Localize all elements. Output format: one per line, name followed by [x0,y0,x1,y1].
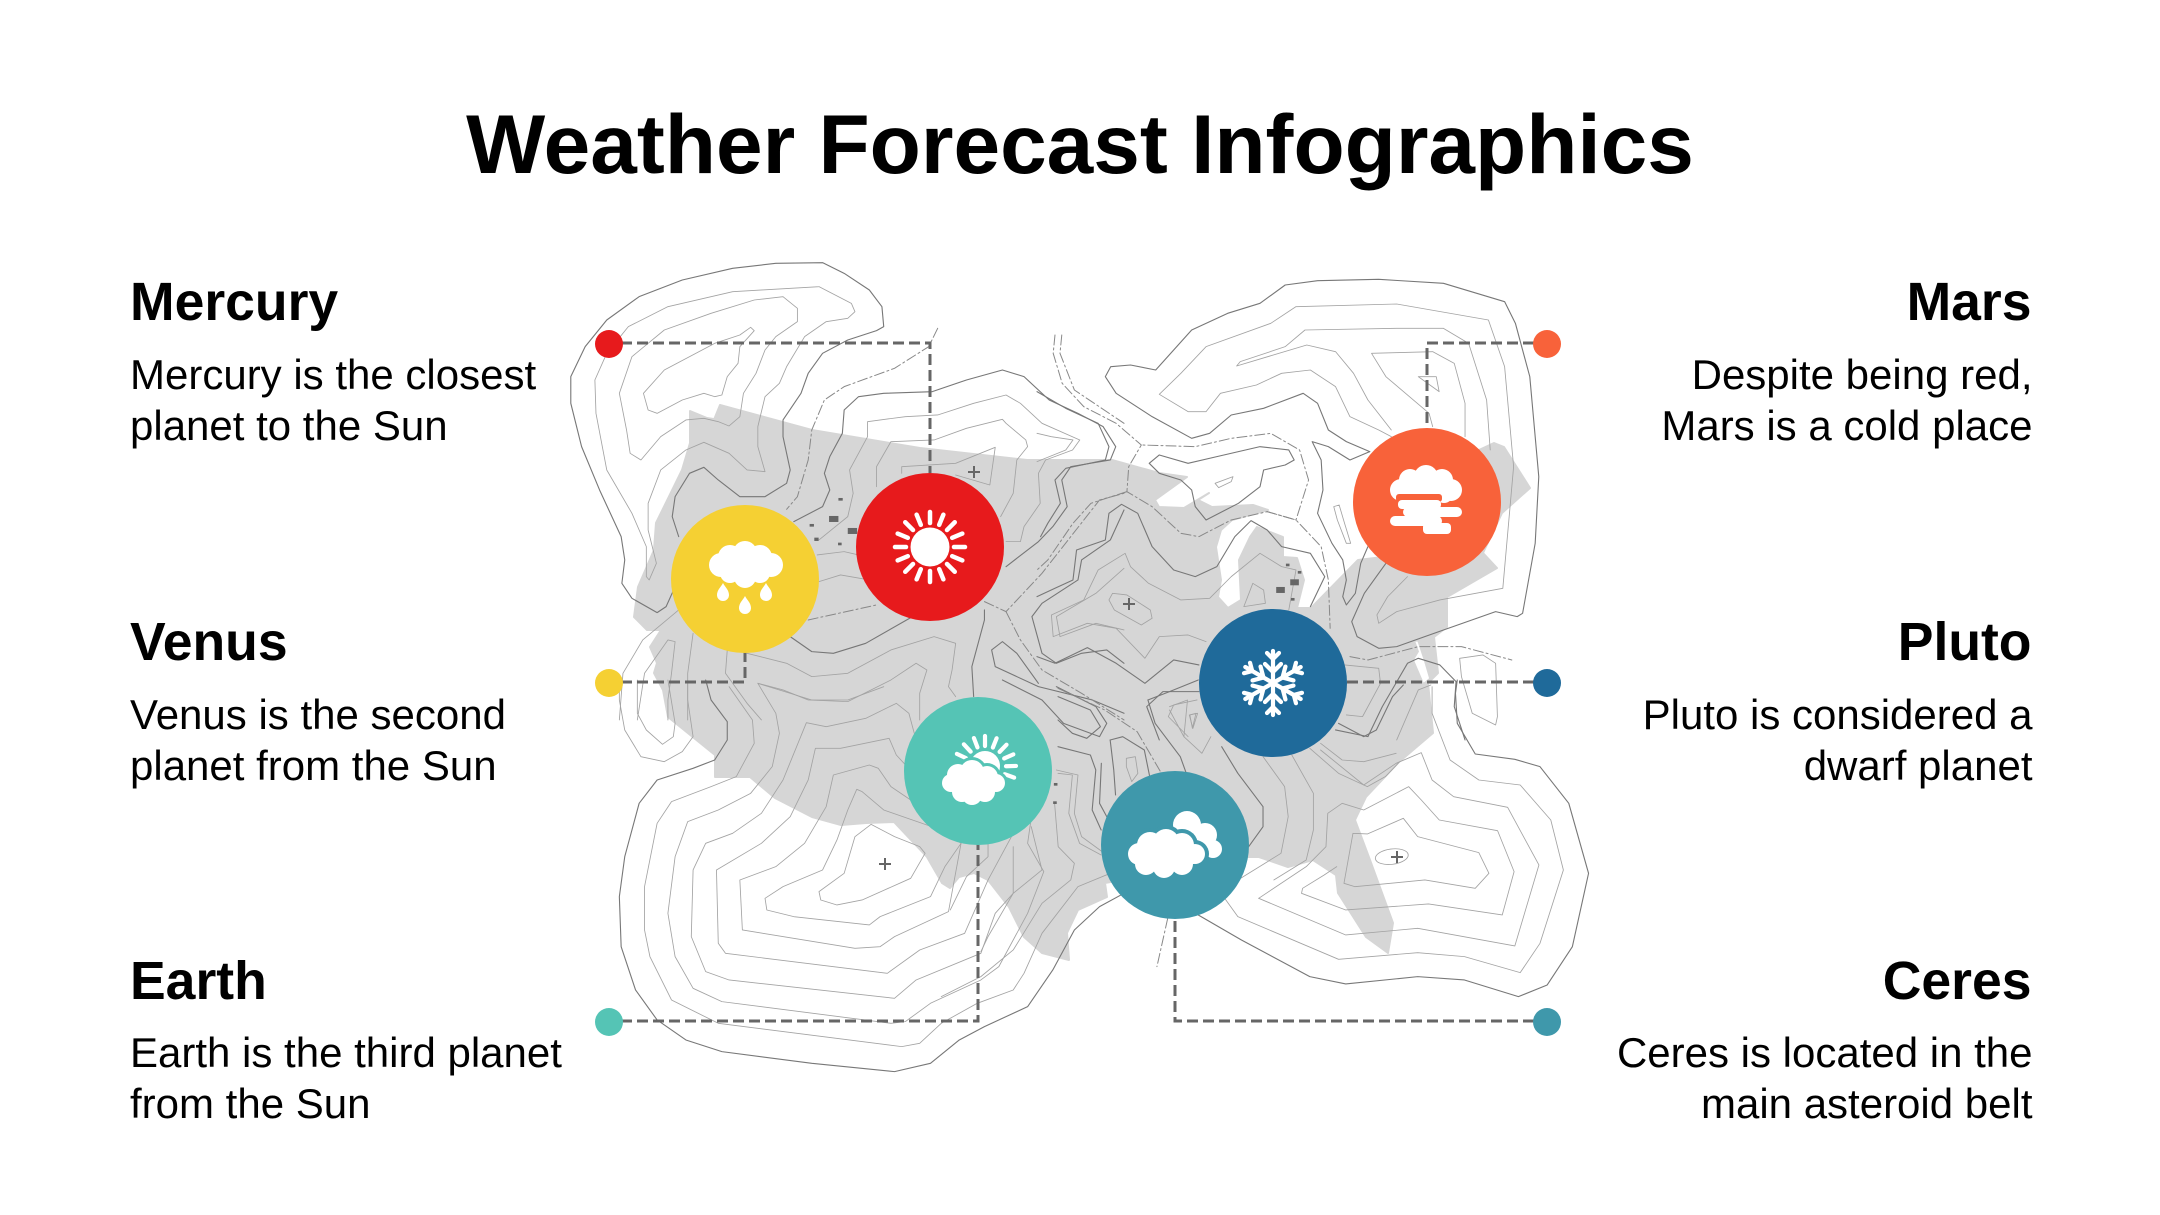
city markers [1053,783,1057,804]
text block: Ceres [1617,952,2033,1127]
text block: Earth: Earth is the third planet [130,1029,562,1076]
text block: Mars: Despite being red, [1692,351,2032,398]
connector: Mars [1427,343,1534,428]
contours: south-east quadrant [1058,680,1589,997]
text block: Pluto: dwarf planet [1804,742,2033,789]
text block: Venus: Venus is the second [130,691,506,738]
dot: Ceres [1533,1008,1561,1036]
text block: Mars [1661,273,2032,449]
map: topographic United States [571,263,1589,1072]
plus mark [1123,598,1135,610]
text block: Venus [130,613,506,789]
text block: Ceres: Ceres [1883,952,2032,1011]
contours: north-west quadrant [571,263,1124,720]
dot: Pluto [1533,669,1561,697]
text block: Mars: Mars is a cold place [1661,402,2032,449]
plus mark [1391,851,1403,863]
dot: Venus [595,669,623,697]
contours: north-east quadrant [1037,279,1539,740]
connector: Mercury [621,343,930,473]
land mass [634,405,1530,960]
icon: fog cloud on orange circle [1353,428,1501,576]
title: Weather Forecast Infographics [466,97,1694,191]
text block: Mercury: Mercury is the closest [130,351,536,398]
connector: Earth [621,844,978,1021]
text block: Pluto [1643,613,2033,789]
icon: sun on red circle [856,473,1004,621]
connector: Pluto [1346,680,1534,684]
text block: Mercury: planet to the Sun [130,402,448,449]
dot: Earth [595,1008,623,1036]
icon: clouds on petrol circle [1101,771,1249,919]
city markers [810,498,857,545]
plus mark [968,466,980,478]
text block: Mercury [130,273,536,449]
text block: Mercury: Mercury [130,273,338,332]
connector: Ceres [1175,917,1534,1021]
text block: Venus: Venus [130,613,288,672]
text block: Earth [130,952,562,1127]
text block: Mars: Mars [1907,273,2032,332]
icon: rain cloud on yellow circle [671,505,819,653]
icon: sun behind cloud on teal circle [904,697,1052,845]
connector: Venus [621,652,745,682]
dot: Mars [1533,330,1561,358]
text block: Earth: Earth [130,952,267,1011]
dot: Mercury [595,330,623,358]
city markers [1276,564,1301,601]
text block: Pluto: Pluto is considered a [1643,691,2033,738]
plus mark [879,858,891,870]
text block: Ceres: main asteroid belt [1701,1080,2033,1127]
text block: Earth: from the Sun [130,1080,370,1127]
text block: Ceres: Ceres is located in the [1617,1029,2032,1076]
text block: Pluto: Pluto [1898,613,2032,672]
icon: snowflake on blue circle [1199,609,1347,757]
contours: south-west quadrant [619,680,1124,1072]
text block: Venus: planet from the Sun [130,742,497,789]
